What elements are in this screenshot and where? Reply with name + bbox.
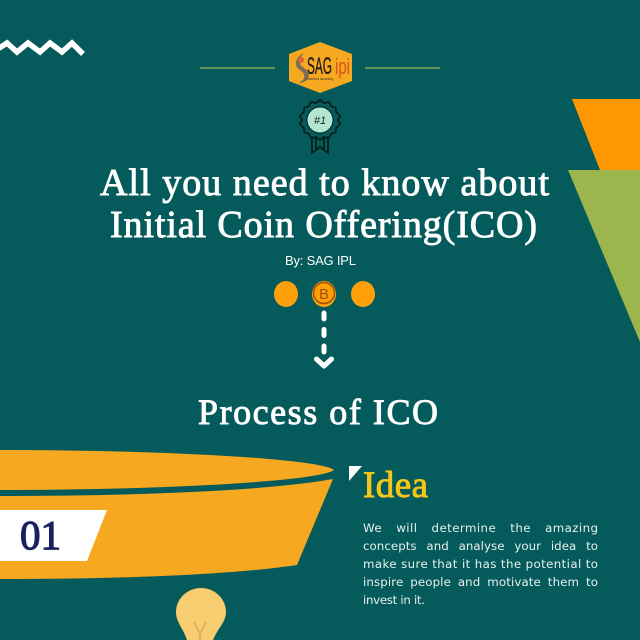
body text: [363, 521, 598, 607]
icon: light bulb: [176, 588, 226, 640]
header rule right: [365, 67, 440, 69]
number tab: [0, 510, 107, 561]
funnel body: [0, 479, 333, 579]
body text: concepts and analyse your idea to: [363, 539, 598, 553]
body text: make sure that it has the potential to: [363, 557, 598, 571]
byline: By: SAG IPL: [285, 253, 356, 268]
icon: white zigzag: [0, 43, 83, 54]
logo: SAG ipl hexagon: SAG: [307, 53, 332, 80]
corner marker: [349, 466, 362, 481]
heading: Idea: Idea: [363, 465, 428, 506]
decorative green triangle: [568, 170, 640, 342]
body text: invest in it.: [363, 593, 425, 607]
arrow: dashed down arrow: [316, 313, 332, 366]
heading: Process of ICO: Process of ICO: [198, 392, 438, 432]
icon: #1 rosette badge: #1: [314, 115, 326, 127]
number tab: 01: [20, 512, 61, 558]
decorative orange triangle: [572, 99, 640, 170]
icon: coin dots: B: [319, 286, 329, 303]
logo: SAG ipl hexagon: ipi: [335, 54, 350, 79]
title: [100, 162, 549, 246]
body text: We will determine the amazing: [363, 521, 598, 535]
funnel rim: [0, 450, 334, 490]
title: All you need to know about: [100, 162, 549, 204]
logo: SAG ipl hexagon: [289, 42, 352, 93]
body text: inspire people and motivate them to: [363, 575, 598, 589]
title: Initial Coin Offering(ICO): [110, 204, 537, 246]
funnel stage 01: [0, 450, 334, 579]
logo: SAG ipl hexagon: Solutions according: [307, 76, 333, 81]
icon: coin dots: [274, 281, 375, 307]
icon: #1 rosette badge: [300, 100, 340, 153]
header rule left: [200, 67, 275, 69]
